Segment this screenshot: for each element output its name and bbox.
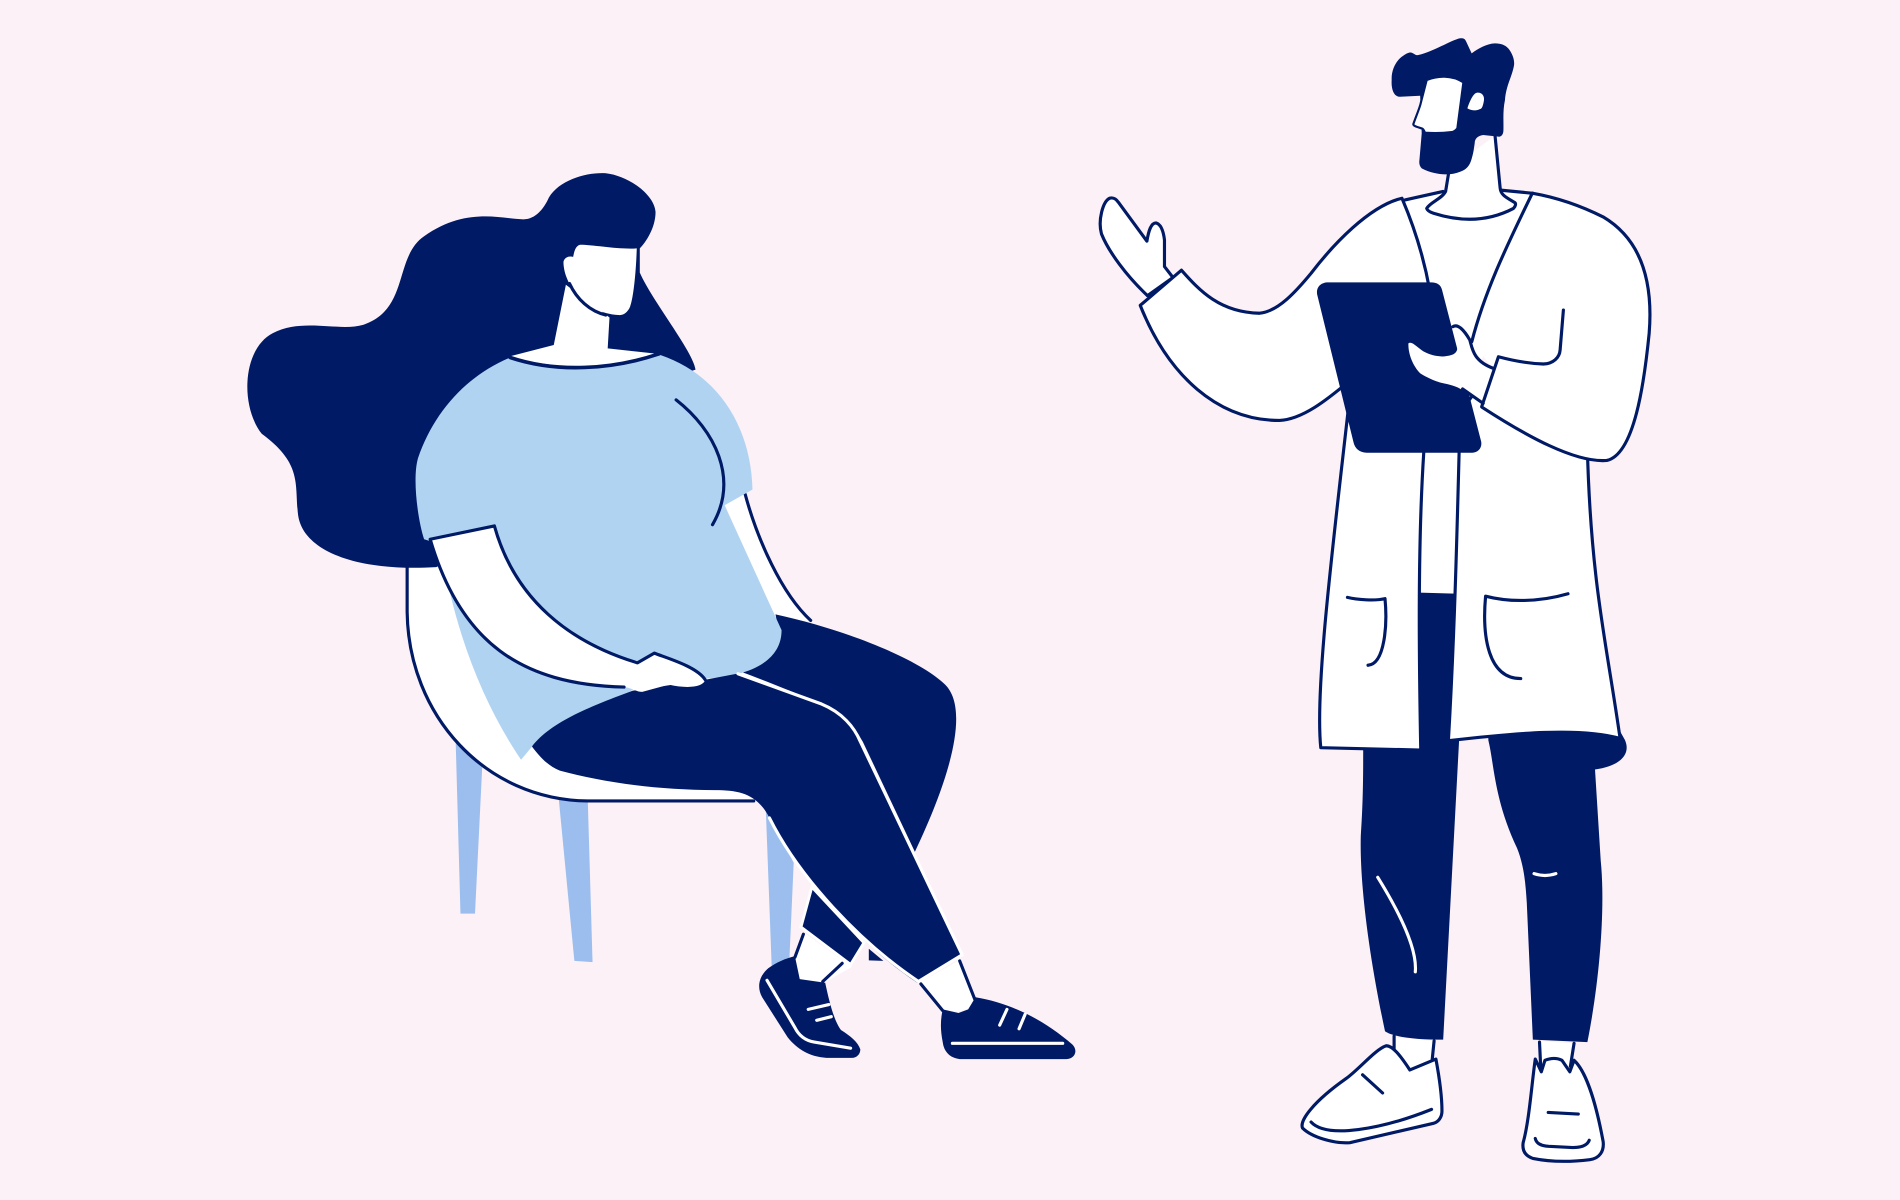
shirt (416, 355, 782, 760)
sock (1393, 1037, 1435, 1071)
coat body (1320, 190, 1620, 751)
woman patient (247, 173, 1075, 1059)
collar (510, 354, 659, 368)
back leg (737, 614, 956, 852)
doctor (1100, 38, 1650, 1161)
chair seat and back (407, 533, 776, 801)
left sock (795, 933, 852, 983)
beard and hair (1392, 38, 1514, 174)
chair (407, 533, 794, 972)
clipboard (1317, 282, 1481, 453)
right sock (920, 960, 974, 1012)
shoe details (1535, 1112, 1589, 1148)
shoe details (1311, 1075, 1432, 1131)
lower back leg (801, 887, 864, 965)
trouser panel between coat sides (1415, 593, 1459, 751)
right trouser leg (1488, 727, 1627, 1042)
doctor right lapel (1472, 193, 1532, 342)
hand outline (1453, 326, 1493, 403)
face (1413, 77, 1463, 133)
left coat panel (1320, 400, 1424, 750)
arm outline (430, 526, 705, 687)
inner shirt fill (1402, 190, 1533, 594)
shoe (1523, 1058, 1603, 1161)
sock lines (1394, 1036, 1434, 1059)
chin line (570, 284, 606, 315)
left shoe (759, 956, 860, 1058)
left sock lines (795, 934, 842, 982)
neck fill (1427, 136, 1516, 219)
small trouser hem (869, 949, 883, 961)
collar lines (1405, 190, 1533, 200)
hand on clipboard (1408, 326, 1493, 403)
ear (1467, 93, 1484, 110)
doctor right shoulder and sleeve fill (1472, 193, 1650, 461)
right sock lines (921, 961, 975, 1011)
doctor left shoe and sock (1302, 1036, 1442, 1143)
neck and neckline (1427, 136, 1516, 219)
left pocket (1347, 597, 1386, 665)
right coat panel (1448, 388, 1620, 741)
chair legs (456, 739, 794, 972)
doctor raised hand (1100, 198, 1173, 296)
doctor right shoe and sock (1523, 1041, 1603, 1161)
sock (1540, 1041, 1574, 1066)
left trouser leg (1361, 734, 1459, 1040)
hair (247, 173, 696, 568)
doctor raised sleeve (1140, 198, 1430, 420)
right pocket (1485, 594, 1568, 679)
chair outline (407, 565, 754, 801)
face (563, 245, 637, 315)
right shoe highlights (952, 1009, 1063, 1043)
trouser highlights (1378, 874, 1556, 972)
shoe (1302, 1046, 1442, 1143)
arm resting on belly (430, 526, 705, 692)
front leg highlight (738, 674, 962, 982)
sock lines (1540, 1042, 1574, 1068)
neck (510, 285, 658, 366)
left shoe highlights (767, 980, 851, 1048)
sleeve fold (676, 400, 724, 525)
chair back strip behind torso (725, 491, 812, 622)
doctor right sleeve outer line (1482, 193, 1650, 461)
chair back line (745, 494, 811, 620)
doctor trousers (1361, 727, 1627, 1042)
right cuff line (1482, 310, 1563, 407)
front leg (532, 674, 962, 983)
right shoe (941, 997, 1075, 1059)
